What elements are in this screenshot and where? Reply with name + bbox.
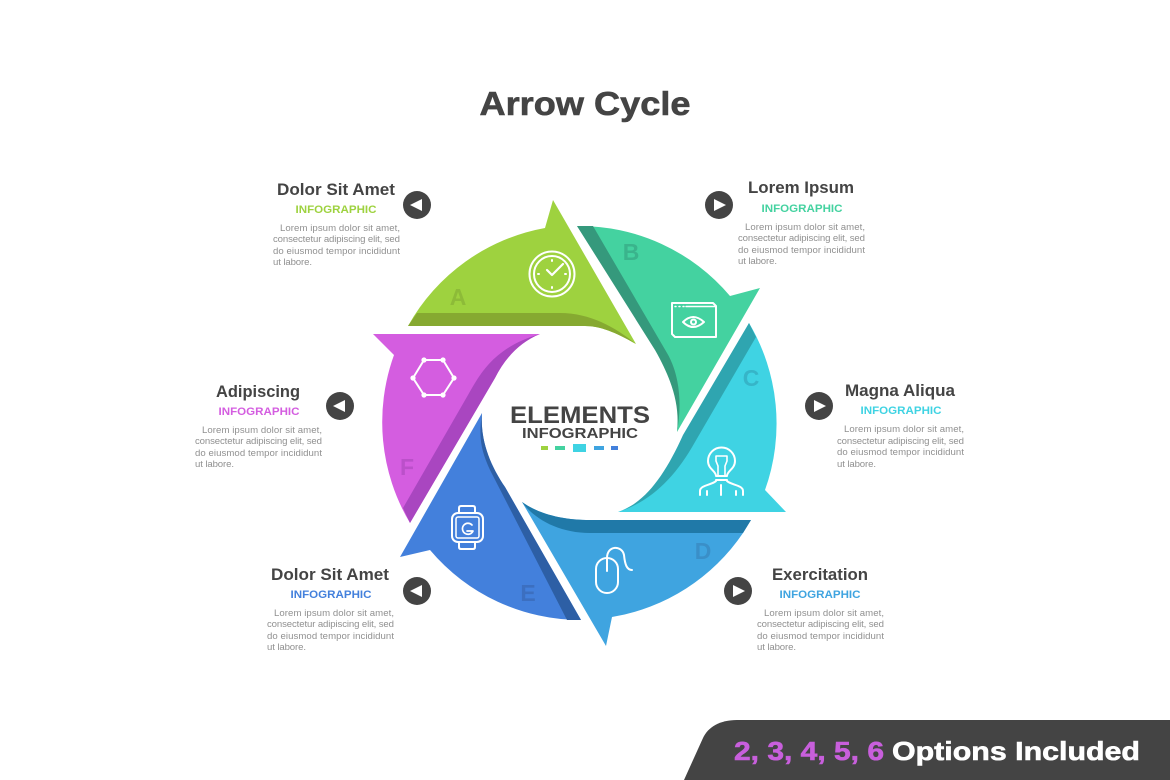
button F [326, 392, 354, 420]
label block D: ut labore. [757, 642, 796, 653]
button E [403, 577, 431, 605]
label block B: do eiusmod tempor incididunt [738, 245, 865, 256]
label block C: Lorem ipsum dolor sit amet, [844, 424, 964, 435]
label block C: Magna Aliqua [845, 382, 956, 400]
segment E: royal blue arrow [400, 413, 581, 620]
label block F: ut labore. [195, 459, 234, 470]
label block F: consectetur adipiscing elit, sed [195, 436, 322, 447]
letter F: F [400, 454, 414, 480]
label block D: Lorem ipsum dolor sit amet, [764, 608, 884, 619]
label block E: do eiusmod tempor incididunt [267, 631, 394, 642]
label block F: Adipiscing [216, 383, 300, 401]
label block B: INFOGRAPHIC [762, 203, 843, 215]
segment F: purple arrow [373, 334, 540, 523]
label block C: ut labore. [837, 459, 876, 470]
banner: options included: 2, 3, 4, 5, 6 [734, 736, 884, 766]
label block A: consectetur adipiscing elit, sed [273, 234, 400, 245]
segment B: teal arrow [577, 226, 760, 432]
label block D: consectetur adipiscing elit, sed [757, 619, 884, 630]
label block C: INFOGRAPHIC [860, 405, 942, 417]
label block D: do eiusmod tempor incididunt [757, 631, 884, 642]
center label [510, 402, 650, 452]
icon: browser window with eye [672, 303, 716, 337]
label block E [267, 566, 394, 653]
button D [724, 577, 752, 605]
label block A: Lorem ipsum dolor sit amet, [280, 223, 400, 234]
segment A: green arrow [408, 200, 636, 344]
letter E: E [520, 580, 536, 606]
label block C [837, 382, 964, 470]
icon: clock [530, 252, 574, 296]
letter D: D [695, 538, 711, 564]
label block E: INFOGRAPHIC [290, 589, 372, 601]
button C [805, 392, 833, 420]
label block B: Lorem Ipsum [748, 179, 854, 197]
icon: computer mouse [596, 548, 632, 593]
label block D: Exercitation [772, 566, 868, 584]
label block A: do eiusmod tempor incididunt [273, 246, 400, 257]
label block B: consectetur adipiscing elit, sed [738, 233, 865, 244]
letter A: A [450, 284, 466, 310]
label block A [273, 181, 400, 268]
label block B: Lorem ipsum dolor sit amet, [745, 222, 865, 233]
icon: hexagon network [411, 358, 456, 397]
label block C: do eiusmod tempor incididunt [837, 447, 964, 458]
label block A: ut labore. [273, 257, 312, 268]
label block D: INFOGRAPHIC [780, 589, 861, 601]
label block F: do eiusmod tempor incididunt [195, 448, 322, 459]
letter C: C [743, 365, 759, 391]
label block F: INFOGRAPHIC [218, 406, 300, 418]
icon: smart watch [452, 506, 483, 549]
label block A: INFOGRAPHIC [296, 204, 377, 216]
label block F [195, 383, 322, 470]
icon: person with light bulb [700, 448, 743, 495]
label block F: Lorem ipsum dolor sit amet, [202, 425, 322, 436]
letter B: B [623, 239, 639, 265]
label block E: consectetur adipiscing elit, sed [267, 619, 394, 630]
label block A: Dolor Sit Amet [277, 181, 396, 199]
segment C: cyan arrow [618, 323, 786, 512]
label block E: Lorem ipsum dolor sit amet, [274, 608, 394, 619]
title: Arrow Cycle [480, 85, 690, 122]
label block B: ut labore. [738, 256, 777, 267]
label block D [757, 566, 884, 653]
button A [403, 191, 431, 219]
center label: ELEMENTS [510, 402, 650, 429]
label block C: consectetur adipiscing elit, sed [837, 436, 964, 447]
segment D: blue arrow [522, 502, 751, 646]
banner: options included [684, 720, 1170, 780]
center label: INFOGRAPHIC [522, 426, 639, 442]
label block B [738, 179, 865, 267]
label block E: ut labore. [267, 642, 306, 653]
label block E: Dolor Sit Amet [271, 566, 390, 584]
banner: options included: Options Included [892, 736, 1140, 766]
button B [705, 191, 733, 219]
center colour swatches [541, 444, 618, 452]
